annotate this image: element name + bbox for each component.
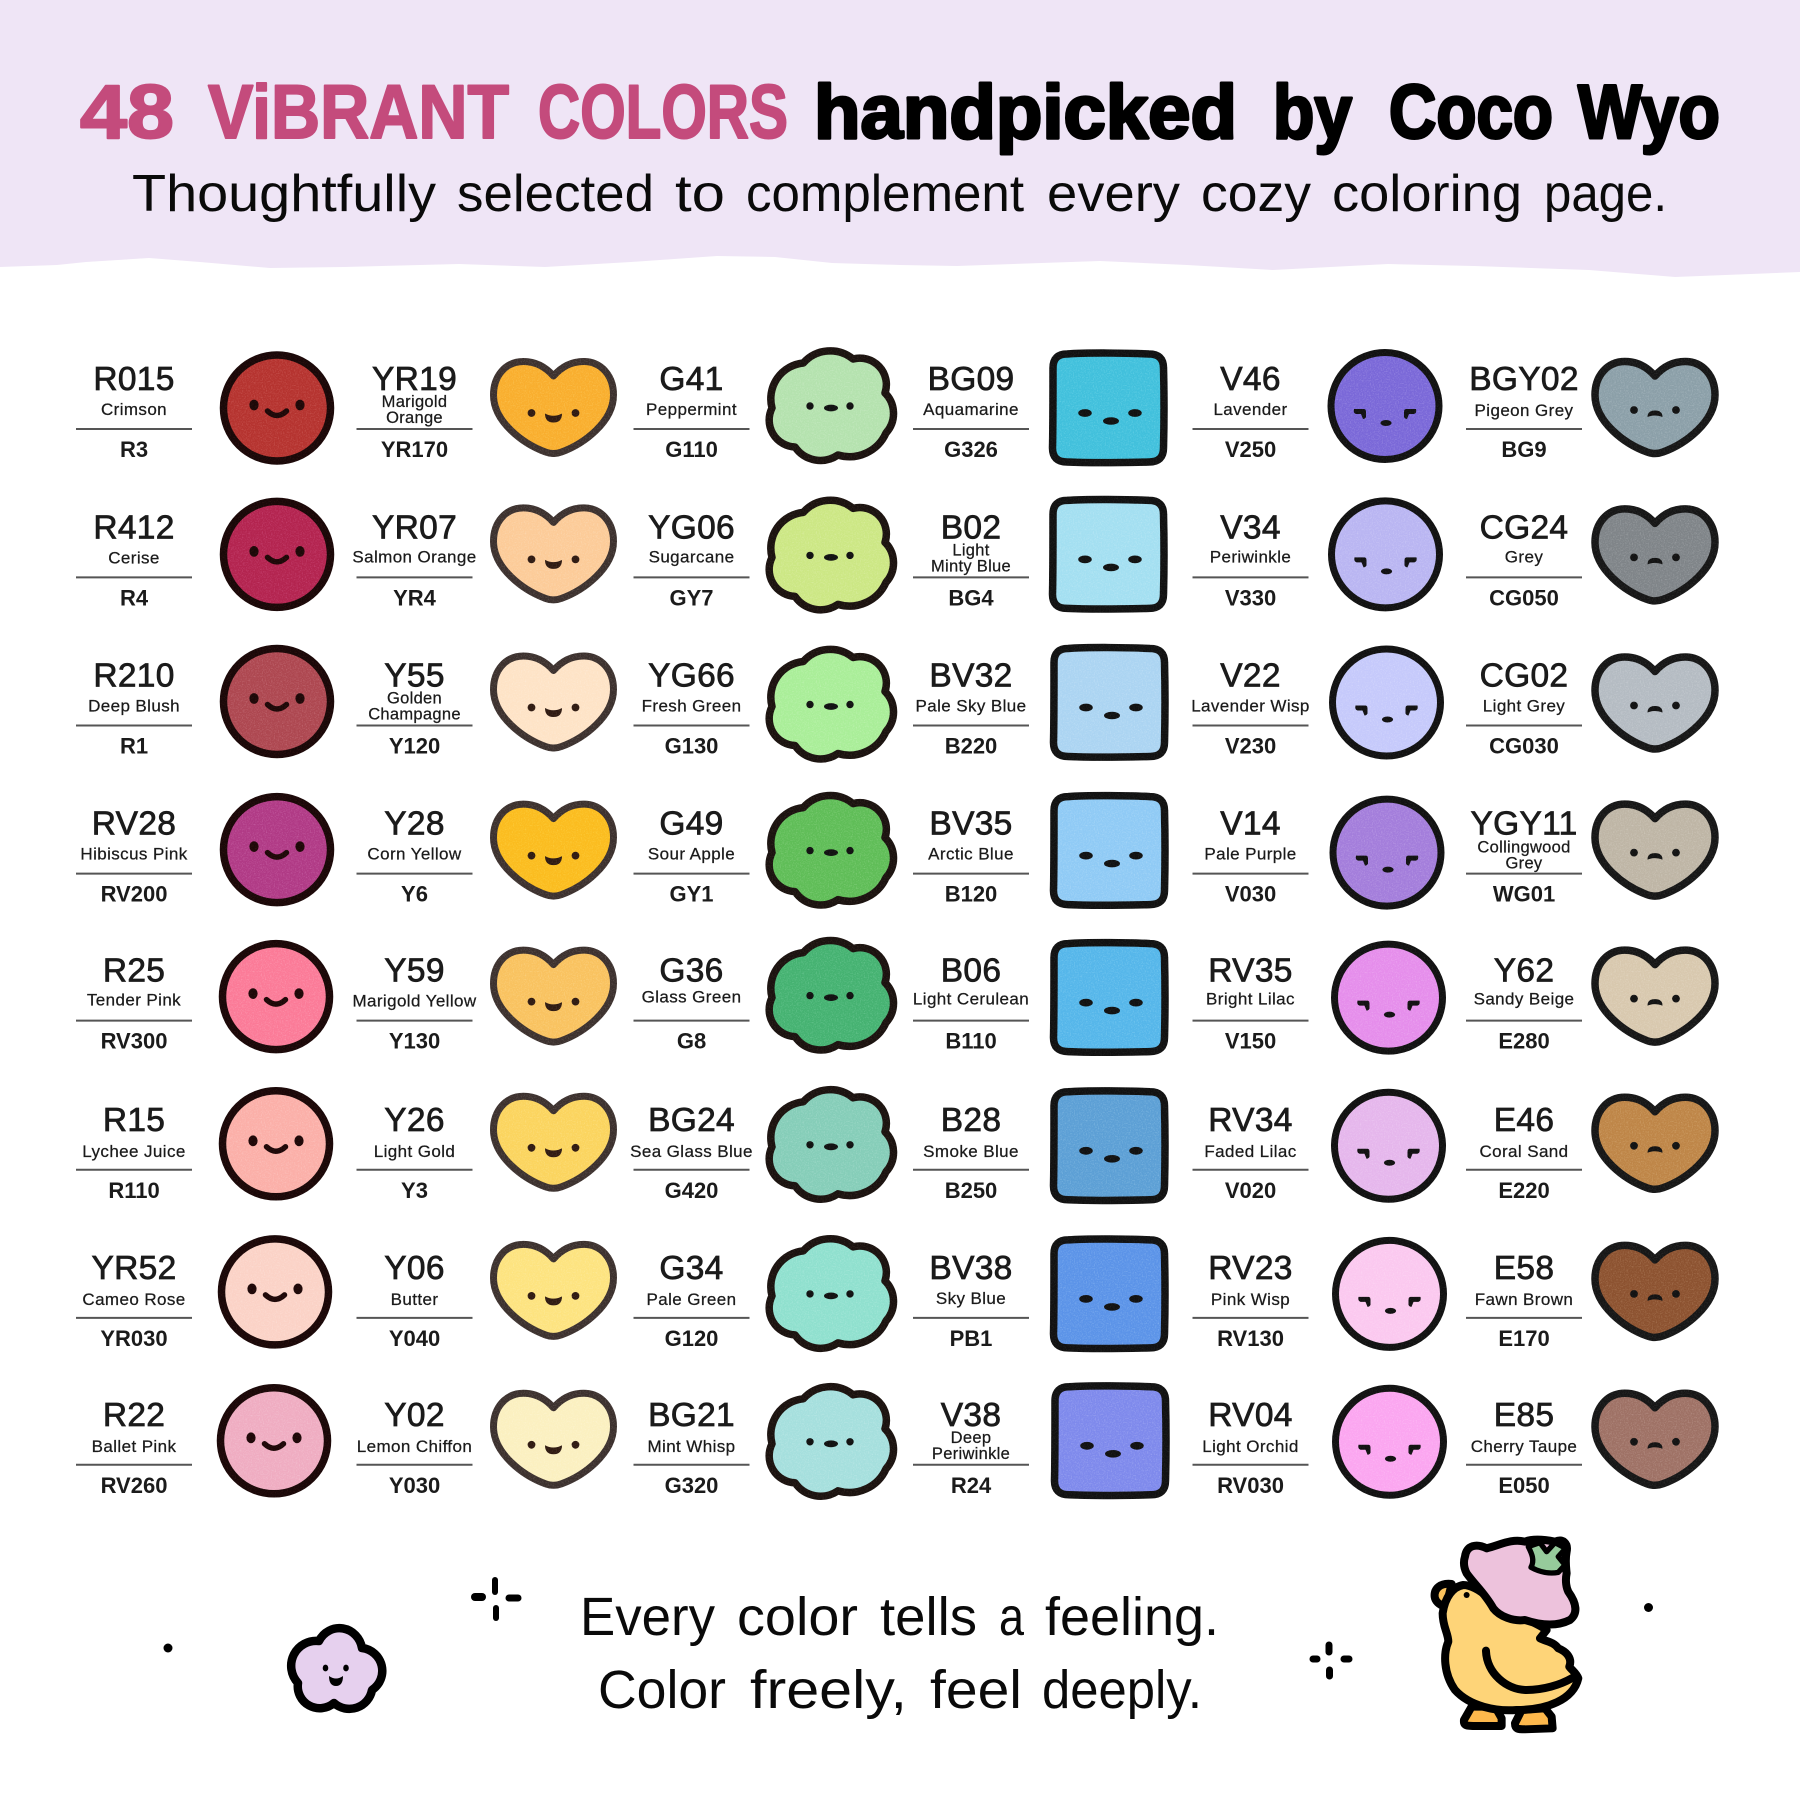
title part: pink [80, 70, 788, 155]
swatch: Y02 Lemon Chiffon [356, 1393, 614, 1498]
swatch: V14 Pale Purple: V030 [1225, 882, 1276, 907]
title part: black [814, 70, 1720, 155]
swatch: CG02 Light Grey: CG030 [1489, 734, 1559, 758]
swatch: BV35 Arctic Blue [913, 796, 1165, 907]
swatch: RV04 Light Orchid [1192, 1388, 1444, 1498]
swatch: E85 Cherry Taupe: E85 [1494, 1397, 1554, 1434]
swatch: BGY02 Pigeon Grey [1466, 361, 1715, 462]
swatch: R25 Tender Pink: R25 [103, 953, 165, 990]
swatch: RV34 Faded Lilac: Faded Lilac [1204, 1142, 1297, 1161]
swatch: YG66 Fresh Green: YG66 [648, 658, 735, 694]
swatch: G36 Glass Green: Glass Green [642, 988, 741, 1007]
closing message: a [999, 1587, 1025, 1647]
swatch: R15 Lychee Juice: Lychee Juice [82, 1142, 186, 1161]
swatch: G41 Peppermint: G110 [665, 437, 718, 462]
swatch: B02 Light Minty Blue: Light [952, 541, 990, 559]
swatch: G41 Peppermint: Peppermint [646, 400, 737, 419]
title: 48 vibrant colors handpicked by Coco Wyo [80, 70, 1720, 155]
swatch: RV35 Bright Lilac: RV35 [1208, 953, 1293, 990]
swatch: BV32 Pale Sky Blue [913, 648, 1165, 758]
swatch: R15 Lychee Juice [76, 1091, 330, 1203]
swatch: B06 Light Cerulean: B110 [945, 1029, 997, 1054]
swatch: Y62 Sandy Beige: Y62 [1494, 953, 1554, 990]
swatch: BV32 Pale Sky Blue: B220 [945, 734, 997, 758]
swatch: BV35 Arctic Blue: B120 [945, 882, 997, 907]
swatch: Y59 Marigold Yellow: Marigold Yellow [352, 992, 477, 1011]
swatch: V38 Deep Periwinkle [913, 1386, 1166, 1498]
swatch: BG09 Aquamarine: G326 [944, 437, 998, 462]
swatch: Y62 Sandy Beige: E280 [1498, 1029, 1550, 1054]
swatch: RV23 Pink Wisp: RV23 [1208, 1250, 1293, 1287]
swatch: R015 Crimson [76, 355, 330, 462]
swatch: YR19 Marigold Orange [356, 361, 614, 462]
swatch: R22 Ballet Pink: Ballet Pink [92, 1437, 176, 1456]
swatch: RV04 Light Orchid: Light Orchid [1202, 1437, 1299, 1456]
swatch: Y55 Golden Champagne: Y120 [389, 734, 440, 758]
swatch: RV34 Faded Lilac: RV34 [1208, 1102, 1293, 1139]
swatch: G36 Glass Green: G8 [677, 1029, 706, 1054]
swatch: YR19 Marigold Orange: YR170 [381, 437, 448, 462]
swatch: Y62 Sandy Beige [1466, 950, 1715, 1054]
swatch: YG06 Sugarcane: YG06 [648, 509, 735, 546]
swatch: V38 Deep Periwinkle: V38 [941, 1397, 1001, 1434]
swatch: BG21 Mint Whisp [634, 1387, 894, 1498]
swatch: BG21 Mint Whisp: G320 [665, 1473, 718, 1498]
swatch: Y02 Lemon Chiffon: Lemon Chiffon [357, 1437, 472, 1456]
swatch: R210 Deep Blush [76, 648, 330, 758]
icon: sparkle right [1313, 1645, 1349, 1676]
swatch: YR07 Salmon Orange: Salmon Orange [352, 547, 477, 566]
swatch: YR19 Marigold Orange: Marigold [382, 393, 447, 411]
title part: pink: ViBRANT [208, 70, 509, 155]
swatch: G34 Pale Green: Pale Green [646, 1290, 736, 1309]
duck eye [1464, 1592, 1470, 1598]
swatch: E46 Coral Sand: Coral Sand [1479, 1142, 1569, 1161]
swatch: BG09 Aquamarine: Aquamarine [923, 400, 1019, 419]
swatch: R412 Cerise: R4 [120, 585, 149, 610]
swatch: RV23 Pink Wisp: Pink Wisp [1211, 1290, 1290, 1309]
swatch: Y55 Golden Champagne: Champagne [368, 706, 461, 724]
swatch: V34 Periwinkle [1192, 501, 1440, 610]
swatch: YR52 Cameo Rose [76, 1239, 328, 1351]
swatch: V38 Deep Periwinkle: Periwinkle [932, 1445, 1010, 1463]
swatch: Y06 Butter: Y040 [389, 1326, 440, 1351]
swatch: R015 Crimson: Crimson [101, 400, 167, 419]
swatch: BG24 Sea Glass Blue: Sea Glass Blue [630, 1142, 753, 1161]
closing message: Color [598, 1660, 726, 1720]
swatch: B06 Light Cerulean [913, 943, 1165, 1054]
swatch: RV04 Light Orchid: RV04 [1208, 1397, 1293, 1434]
swatch: B28 Smoke Blue: Smoke Blue [923, 1142, 1019, 1161]
swatch: YR19 Marigold Orange: YR19 [372, 361, 457, 398]
swatch: B06 Light Cerulean: Light Cerulean [913, 990, 1029, 1009]
swatch: Y28 Corn Yellow [356, 804, 614, 907]
swatch: G34 Pale Green: G120 [665, 1326, 718, 1351]
swatch: R015 Crimson: R3 [120, 437, 148, 462]
closing message: freely, [750, 1660, 907, 1720]
title part: pink: 48 [80, 70, 174, 155]
swatch: V46 Lavender: V46 [1220, 361, 1281, 398]
swatch: B28 Smoke Blue: B28 [941, 1102, 1001, 1139]
swatch: V46 Lavender [1192, 352, 1439, 462]
swatch: Y28 Corn Yellow: Y6 [401, 882, 428, 907]
duck body [1443, 1585, 1578, 1710]
swatch: V22 Lavender Wisp: V22 [1220, 658, 1281, 694]
swatch: V22 Lavender Wisp [1191, 649, 1440, 758]
swatch: E46 Coral Sand [1466, 1097, 1715, 1203]
swatch: R22 Ballet Pink: RV260 [101, 1473, 167, 1498]
swatch: BG24 Sea Glass Blue [630, 1090, 894, 1203]
swatch: B06 Light Cerulean: B06 [941, 953, 1001, 990]
swatch: RV23 Pink Wisp [1192, 1240, 1444, 1351]
swatch: Y06 Butter: Butter [391, 1290, 438, 1309]
swatch: Y55 Golden Champagne: Y55 [384, 658, 445, 694]
duck beak [1435, 1584, 1452, 1607]
icon: sparkle left [475, 1580, 518, 1618]
swatch: E46 Coral Sand: E46 [1494, 1102, 1554, 1139]
swatch: G41 Peppermint: G41 [659, 361, 724, 398]
swatch: BG24 Sea Glass Blue: G420 [665, 1178, 718, 1203]
swatch: R412 Cerise: R412 [93, 509, 175, 546]
hat [1464, 1540, 1575, 1624]
swatch: CG24 Grey: CG050 [1489, 585, 1559, 610]
swatch: R210 Deep Blush: R1 [120, 734, 148, 758]
swatch: B02 Light Minty Blue: B02 [941, 509, 1001, 546]
closing message: deeply. [1042, 1660, 1202, 1720]
swatch: Y62 Sandy Beige: Sandy Beige [1474, 990, 1574, 1009]
swatch: G34 Pale Green: G34 [659, 1250, 724, 1287]
swatch: R15 Lychee Juice: R15 [103, 1102, 165, 1139]
panel: header banner with torn edge [0, 0, 1800, 277]
swatch: G49 Sour Apple [634, 795, 894, 907]
swatch: Y59 Marigold Yellow [352, 950, 614, 1054]
swatch: G49 Sour Apple: Sour Apple [648, 845, 735, 864]
swatch: G49 Sour Apple: GY1 [669, 882, 714, 907]
swatch: R25 Tender Pink: RV300 [101, 1029, 167, 1054]
swatch: Y02 Lemon Chiffon: Y02 [384, 1397, 445, 1434]
swatch: Y59 Marigold Yellow: Y59 [384, 953, 445, 990]
swatch: BG21 Mint Whisp: Mint Whisp [647, 1437, 736, 1456]
swatch: E46 Coral Sand: E220 [1498, 1178, 1550, 1203]
swatch: YR07 Salmon Orange: YR07 [372, 509, 457, 546]
swatch: RV04 Light Orchid: RV030 [1217, 1473, 1284, 1498]
swatch: R15 Lychee Juice: R110 [108, 1178, 160, 1203]
swatch: BV38 Sky Blue: BV38 [929, 1250, 1013, 1287]
swatch: BG24 Sea Glass Blue: BG24 [648, 1102, 735, 1139]
swatch: E58 Fawn Brown: E58 [1494, 1250, 1554, 1287]
decoration: dot right [1644, 1603, 1653, 1612]
swatch: YG06 Sugarcane: GY7 [669, 585, 714, 610]
swatch: R015 Crimson: R015 [93, 361, 175, 398]
swatch: YGY11 Collingwood Grey: Grey [1506, 855, 1543, 873]
swatch: V34 Periwinkle: Periwinkle [1210, 547, 1291, 566]
closing message: Every [580, 1587, 715, 1647]
swatch: CG24 Grey: Grey [1505, 547, 1543, 566]
swatch: RV28 Hibiscus Pink: RV200 [101, 882, 167, 907]
subtitle: to [675, 165, 725, 223]
closing message: feel [930, 1660, 1022, 1720]
swatch: B02 Light Minty Blue: Minty Blue [931, 557, 1011, 575]
subtitle: coloring [1332, 165, 1522, 223]
swatch: BG09 Aquamarine [913, 353, 1164, 463]
swatch: V34 Periwinkle: V34 [1220, 509, 1281, 546]
swatch: V46 Lavender: Lavender [1213, 400, 1288, 419]
swatch: Y02 Lemon Chiffon: Y030 [389, 1473, 440, 1498]
swatch: YG06 Sugarcane [634, 500, 894, 610]
swatch: YR07 Salmon Orange [352, 508, 614, 610]
swatch: RV34 Faded Lilac [1192, 1092, 1442, 1203]
swatch: V14 Pale Purple: Pale Purple [1204, 845, 1297, 864]
swatch: E58 Fawn Brown [1466, 1245, 1715, 1351]
swatch: V14 Pale Purple [1192, 799, 1441, 907]
swatch: B02 Light Minty Blue [913, 499, 1164, 610]
swatch: YGY11 Collingwood Grey: WG01 [1493, 882, 1555, 907]
swatch: YGY11 Collingwood Grey: YGY11 [1470, 806, 1578, 843]
swatch: V38 Deep Periwinkle: Deep [951, 1429, 991, 1447]
swatch: BV35 Arctic Blue: BV35 [929, 806, 1013, 843]
swatch: YG66 Fresh Green: G130 [665, 734, 718, 758]
duck feet [1464, 1707, 1553, 1729]
swatch: Y26 Light Gold: Y26 [384, 1102, 445, 1139]
swatch: G36 Glass Green: G36 [659, 953, 724, 990]
closing message: color [737, 1587, 858, 1647]
swatch: Y59 Marigold Yellow: Y130 [389, 1029, 440, 1054]
title part: black: Coco [1389, 70, 1553, 155]
swatch: BGY02 Pigeon Grey: BGY02 [1469, 361, 1579, 398]
swatch: R22 Ballet Pink [76, 1388, 328, 1498]
hat leaf [1528, 1543, 1566, 1573]
swatch: G49 Sour Apple: G49 [659, 806, 724, 843]
swatch: R210 Deep Blush: R210 [93, 658, 175, 694]
swatch: BGY02 Pigeon Grey: Pigeon Grey [1475, 401, 1574, 420]
swatch: Y06 Butter: Y06 [384, 1250, 445, 1287]
swatch: RV35 Bright Lilac [1192, 944, 1442, 1054]
swatch: BGY02 Pigeon Grey: BG9 [1501, 437, 1547, 462]
swatch: YR07 Salmon Orange: YR4 [393, 585, 437, 610]
swatch: YG66 Fresh Green: Fresh Green [642, 696, 741, 716]
swatch: YR19 Marigold Orange: Orange [386, 409, 443, 427]
swatch: YG66 Fresh Green [634, 649, 894, 759]
swatch: YR52 Cameo Rose: Cameo Rose [82, 1290, 186, 1309]
swatch: Y28 Corn Yellow: Y28 [384, 806, 445, 843]
swatch: CG02 Light Grey: CG02 [1480, 658, 1568, 694]
swatch: RV28 Hibiscus Pink: Hibiscus Pink [80, 845, 188, 864]
swatch: Y28 Corn Yellow: Corn Yellow [367, 845, 462, 864]
swatch: Y55 Golden Champagne [356, 656, 614, 758]
swatch: BV38 Sky Blue [913, 1239, 1165, 1351]
swatch: V22 Lavender Wisp: Lavender Wisp [1191, 696, 1310, 716]
swatch: V38 Deep Periwinkle: R24 [951, 1473, 992, 1498]
swatch: V22 Lavender Wisp: V230 [1225, 734, 1276, 758]
swatch: B28 Smoke Blue [913, 1091, 1165, 1203]
title part: black: by [1273, 70, 1352, 155]
subtitle: page. [1544, 165, 1667, 223]
swatch: RV28 Hibiscus Pink: RV28 [92, 806, 176, 843]
swatch: R412 Cerise: Cerise [108, 548, 160, 567]
swatch: R412 Cerise [76, 501, 330, 610]
swatch: R22 Ballet Pink: R22 [103, 1397, 165, 1434]
swatch: R25 Tender Pink [76, 944, 330, 1054]
swatch: YR52 Cameo Rose: YR52 [92, 1250, 176, 1287]
swatch: CG24 Grey [1466, 509, 1715, 610]
swatch: CG02 Light Grey [1466, 657, 1715, 758]
title part: black: handpicked [814, 70, 1237, 155]
swatch: G36 Glass Green [634, 940, 894, 1054]
swatch: BG09 Aquamarine: BG09 [928, 361, 1014, 398]
decoration: dot left [164, 1644, 172, 1652]
swatch: YR52 Cameo Rose: YR030 [100, 1326, 168, 1351]
subtitle: every [1047, 165, 1180, 223]
icon: purple flower [291, 1628, 382, 1709]
subtitle: cozy [1201, 165, 1311, 223]
swatch: CG24 Grey: CG24 [1480, 509, 1568, 546]
swatch: RV28 Hibiscus Pink [76, 797, 330, 907]
swatch: Y06 Butter [356, 1244, 614, 1351]
swatch: RV35 Bright Lilac: Bright Lilac [1206, 990, 1295, 1009]
swatch: G34 Pale Green [634, 1239, 894, 1351]
closing message: tells [880, 1587, 977, 1647]
swatch: R210 Deep Blush: Deep Blush [88, 696, 180, 716]
swatch: YGY11 Collingwood Grey: Collingwood [1477, 839, 1571, 857]
swatch: CG02 Light Grey: Light Grey [1483, 696, 1565, 716]
swatch: BV32 Pale Sky Blue: BV32 [929, 658, 1013, 694]
swatch: E85 Cherry Taupe [1466, 1393, 1715, 1498]
swatch: E85 Cherry Taupe: E050 [1498, 1473, 1550, 1498]
illustration: yellow duck with pink hat [1435, 1540, 1578, 1729]
swatch: V34 Periwinkle: V330 [1225, 585, 1276, 610]
subtitle [132, 165, 1667, 223]
swatch: B28 Smoke Blue: B250 [945, 1178, 997, 1203]
swatch: BV38 Sky Blue: Sky Blue [936, 1289, 1006, 1308]
swatch: Y26 Light Gold [356, 1096, 614, 1203]
swatch: Y55 Golden Champagne: Golden [387, 690, 442, 708]
title part: pink: COLORS [538, 70, 788, 155]
swatch: RV35 Bright Lilac: V150 [1225, 1029, 1276, 1054]
swatch: BV32 Pale Sky Blue: Pale Sky Blue [915, 696, 1027, 716]
subtitle: Thoughtfully [132, 165, 436, 223]
title part: black: Wyo [1578, 70, 1720, 155]
swatch: YG06 Sugarcane: Sugarcane [649, 547, 734, 566]
closing message [580, 1587, 1219, 1720]
swatch: E58 Fawn Brown: Fawn Brown [1475, 1290, 1573, 1309]
subtitle: complement [746, 165, 1025, 223]
swatch: V46 Lavender: V250 [1225, 437, 1276, 462]
swatch: R25 Tender Pink: Tender Pink [87, 991, 181, 1010]
duck wing line [1486, 1651, 1572, 1690]
swatch: V14 Pale Purple: V14 [1220, 806, 1281, 843]
swatch: G41 Peppermint [634, 351, 894, 462]
swatch: E58 Fawn Brown: E170 [1498, 1326, 1550, 1351]
swatch: Y26 Light Gold: Y3 [401, 1178, 428, 1203]
swatch: E85 Cherry Taupe: Cherry Taupe [1471, 1437, 1577, 1456]
swatch: BV38 Sky Blue: PB1 [950, 1326, 992, 1351]
swatch: Y26 Light Gold: Light Gold [374, 1142, 455, 1161]
swatch: RV23 Pink Wisp: RV130 [1217, 1326, 1284, 1351]
subtitle: selected [457, 165, 654, 223]
closing message: feeling. [1045, 1587, 1219, 1647]
swatch: BV35 Arctic Blue: Arctic Blue [928, 845, 1014, 864]
swatch: YGY11 Collingwood Grey [1466, 804, 1715, 907]
swatch: B02 Light Minty Blue: BG4 [948, 585, 994, 610]
swatch: RV34 Faded Lilac: V020 [1225, 1178, 1276, 1203]
swatch: BG21 Mint Whisp: BG21 [648, 1397, 735, 1434]
